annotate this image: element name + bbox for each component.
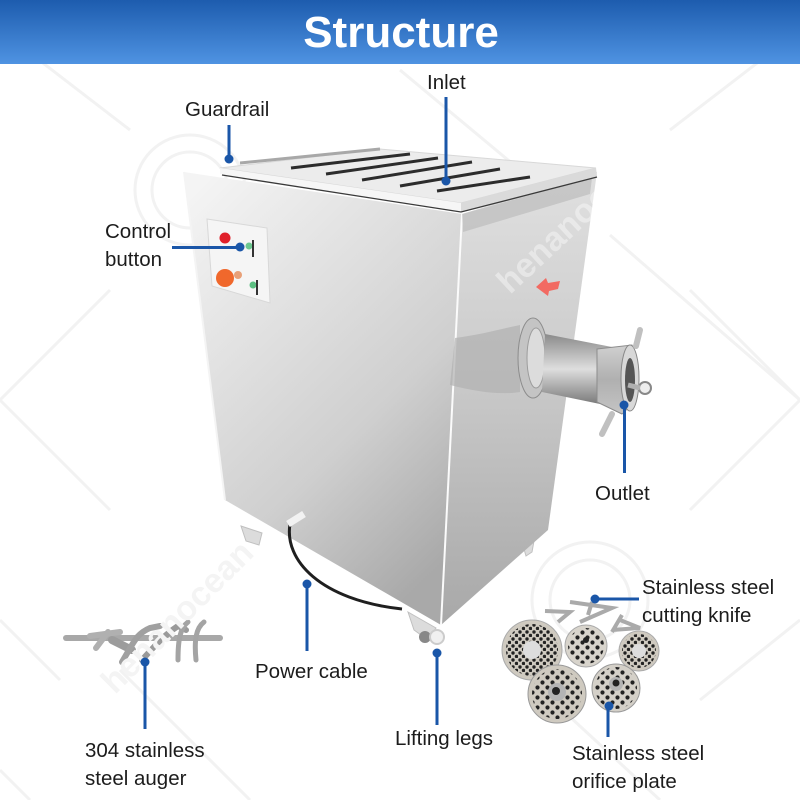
callout: Guardrail xyxy=(185,98,269,164)
front face xyxy=(184,172,462,625)
callout: Control button xyxy=(105,220,244,271)
callout: Inlet xyxy=(427,71,466,186)
callout: Stainless steel orifice plate: orifice plate xyxy=(572,770,677,793)
header banner xyxy=(0,0,800,64)
auger xyxy=(66,622,220,662)
caster wheel xyxy=(419,630,444,644)
outlet tube xyxy=(450,318,651,434)
hopper lid xyxy=(220,149,597,212)
callout: 304 stainless steel auger xyxy=(85,658,205,790)
watermark: henanocean xyxy=(94,534,261,701)
callout: Stainless steel cutting knife xyxy=(590,576,774,627)
cutting knives xyxy=(545,602,640,632)
red arrow mark xyxy=(536,278,560,296)
side face xyxy=(441,172,597,625)
callout: 304 stainless steel auger: steel auger xyxy=(85,767,187,790)
power cable xyxy=(289,524,402,609)
callout: Lifting legs xyxy=(395,648,493,750)
red button xyxy=(220,232,230,244)
orifice plates xyxy=(502,620,659,723)
machine feet xyxy=(241,526,536,640)
inlet slots xyxy=(291,154,530,191)
callout: Control button: button xyxy=(105,248,162,271)
title: Structure xyxy=(303,8,499,57)
callout: 304 stainless steel auger: 304 stainless xyxy=(85,739,205,762)
green lights xyxy=(246,242,252,250)
callout: Power cable: Power cable xyxy=(255,660,368,683)
watermark xyxy=(94,138,661,701)
callout: Inlet: Inlet xyxy=(427,71,466,94)
orange stop button xyxy=(216,269,234,287)
callout: Stainless steel cutting knife: Stainless steel xyxy=(642,576,774,599)
callout: Lifting legs: Lifting legs xyxy=(395,727,493,750)
callout: Stainless steel orifice plate: Stainless steel xyxy=(572,742,704,765)
callout: Power cable xyxy=(255,580,368,683)
watermark: henanocean xyxy=(490,138,661,301)
control panel xyxy=(207,219,270,303)
callout: Guardrail: Guardrail xyxy=(185,98,269,121)
machine xyxy=(184,149,651,644)
callout: Stainless steel orifice plate xyxy=(572,702,704,793)
callout: Outlet xyxy=(595,400,650,505)
callout: Stainless steel cutting knife: cutting knife xyxy=(642,604,751,627)
callout: Outlet: Outlet xyxy=(595,482,650,505)
callout: Control button: Control xyxy=(105,220,171,243)
